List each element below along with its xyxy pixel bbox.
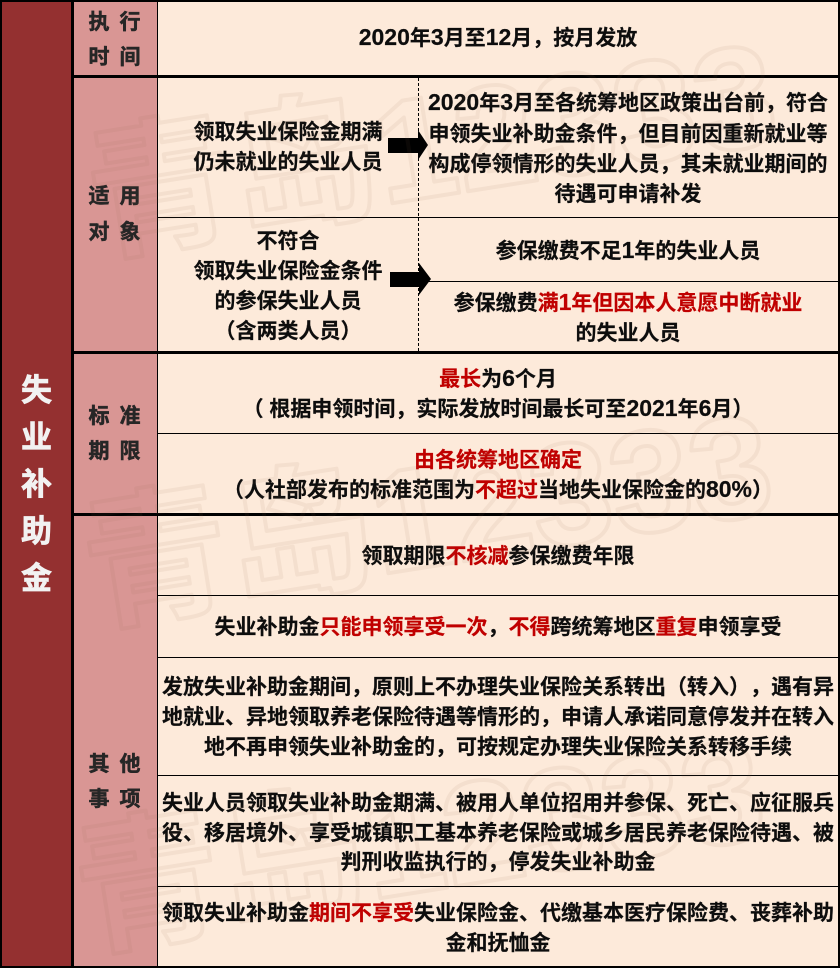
title character 助: 助 [21, 514, 52, 549]
heading: 标准期限 [74, 354, 157, 513]
title character 失: 失 [21, 373, 52, 408]
heading: 标准期限: 期限 [88, 440, 150, 463]
panel: 适用对象 second row [158, 218, 838, 351]
panel: 不享受待遇: 领取失业补助金期间不享受失业保险金、代缴基本医疗保险费、丧葬补助 [162, 902, 834, 925]
panel: 停发情形 [158, 776, 838, 886]
panel: 不享受待遇 [158, 887, 838, 966]
text: 不符合条件的参保失业人员 [194, 230, 382, 343]
panel: 只能申领一次 [158, 596, 838, 657]
panel: 执行时间 content: 2020年3月至12月，按月发放 [359, 24, 637, 50]
panel: 停发情形: 役、移居境外、享受城镇职工基本养老保险或城乡居民养老保险待遇、被 [162, 822, 834, 845]
arrow: second row [390, 263, 431, 295]
panel: 期限: （ 根据申领时间，实际发放时间最长可至2021年6月） [243, 395, 753, 421]
text: 补发条件 [428, 89, 828, 206]
text: 参保缴费满1年: 参保缴费满1年但因本人意愿中断就业 [454, 289, 802, 315]
panel: 停发情形: 判刑收监执行的，停发失业补助金 [340, 851, 656, 874]
heading: 执行时间: 时间 [88, 46, 150, 69]
heading: 适用对象: 适用 [88, 185, 150, 208]
text: 补发条件: 2020年3月至各统筹地区政策出台前，符合 [428, 89, 828, 115]
text: 领取失业保险金期满 [194, 120, 382, 174]
watermark: 青岛12333 [73, 382, 783, 651]
text: 参保缴费满1年 [454, 289, 802, 345]
panel: 标准: 由各统筹地区确定 [414, 449, 582, 472]
panel: 转移接续 [158, 658, 838, 775]
title character 业: 业 [21, 420, 52, 455]
heading: 执行时间: 执行 [88, 11, 150, 34]
panel: 期限: 最长为6个月 [439, 365, 557, 391]
text: 参保缴费不足1年: 参保缴费不足1年的失业人员 [496, 237, 760, 263]
heading: 其他事项 [74, 516, 157, 966]
panel: 适用对象 first row [158, 78, 838, 217]
text: 参保缴费满1年: 的失业人员 [576, 322, 680, 345]
panel: 期限 [158, 354, 838, 433]
text: 不符合条件的参保失业人员: 不符合 [256, 230, 320, 253]
panel: 只能申领一次: 失业补助金只能申领享受一次，不得跨统筹地区重复申领享受 [214, 616, 782, 639]
title character 金: 金 [21, 561, 52, 596]
arrow: first row [388, 131, 428, 158]
text: 领取失业保险金期满: 领取失业保险金期满 [194, 121, 382, 144]
panel: 标准 [158, 434, 838, 513]
text: 补发条件: 申领失业补助金条件，但目前因重新就业等 [428, 123, 828, 146]
panel: 转移接续: 发放失业补助金期间，原则上不办理失业保险关系转出（转入），遇有异 [162, 676, 834, 699]
text: 不符合条件的参保失业人员: （含两类人员） [214, 320, 362, 343]
panel: 不核减: 领取期限不核减参保缴费年限 [362, 545, 634, 568]
watermark: 青岛12333 [77, 12, 787, 281]
title character 补: 补 [21, 467, 52, 502]
panel: main title column [2, 2, 71, 966]
heading: 执行时间 [74, 2, 157, 75]
text: 不符合条件的参保失业人员: 领取失业保险金条件 [194, 260, 382, 283]
panel: 标准: （人社部发布的标准范围为不超过当地失业保险金的80%） [223, 476, 773, 502]
watermark: 青岛12333 [65, 707, 775, 968]
text: 领取失业保险金期满: 仍未就业的失业人员 [194, 151, 382, 174]
text: 补发条件: 构成停领情形的失业人员，其未就业期间的 [428, 153, 828, 176]
panel: 不核减 [158, 516, 838, 595]
heading: 其他事项: 其他 [88, 753, 150, 776]
text: 不符合条件的参保失业人员: 的参保失业人员 [214, 290, 362, 313]
panel: 执行时间 content [158, 2, 838, 75]
text: 补发条件: 待遇可申请补发 [554, 183, 702, 206]
heading: 其他事项: 事项 [88, 788, 150, 811]
heading: 适用对象 [74, 78, 157, 351]
heading: 标准期限: 标准 [88, 405, 150, 428]
panel: 不享受待遇: 金和抚恤金 [446, 932, 550, 955]
heading: 适用对象: 对象 [88, 221, 150, 244]
panel: 转移接续: 地不再申领失业补助金的，可按规定办理失业保险关系转移手续 [204, 736, 792, 759]
panel: 停发情形: 失业人员领取失业补助金期满、被用人单位招用并参保、死亡、应征服兵 [162, 792, 834, 815]
panel: 转移接续: 地就业、异地领取养老保险待遇等情形的，申请人承诺同意停发并在转入 [162, 706, 834, 729]
